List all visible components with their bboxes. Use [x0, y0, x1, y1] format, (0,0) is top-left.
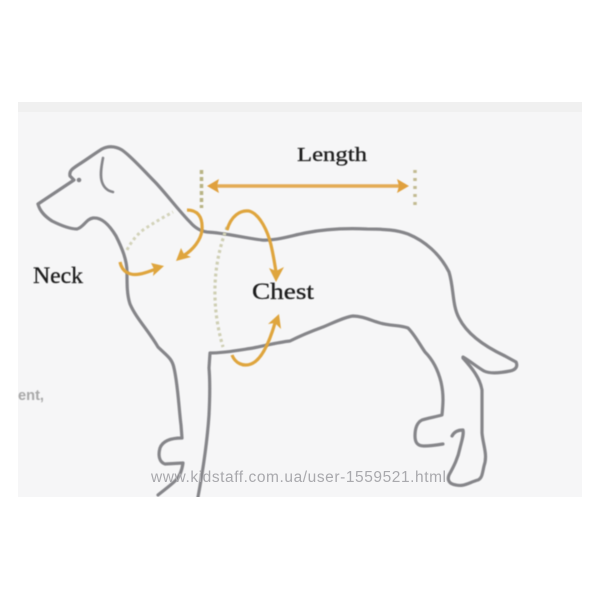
- label: length: Length: [297, 144, 367, 166]
- cropped text fragment: ent,: [18, 387, 44, 404]
- head, back, tail and hind leg: [38, 147, 517, 373]
- length arrow: [207, 179, 409, 193]
- label: chest: Chest: [252, 279, 315, 304]
- dog outline: [38, 147, 517, 497]
- ear: [101, 158, 113, 192]
- eye: [77, 178, 81, 182]
- belly and inner front leg: [198, 316, 443, 497]
- chest arrow: bottom: [232, 314, 281, 365]
- infographic: dog measurement diagram: [18, 102, 582, 497]
- muzzle, throat, chest and front leg: [38, 204, 183, 495]
- label: neck: Neck: [33, 263, 84, 288]
- length left dotted marker: [200, 170, 203, 208]
- panel: image background: [18, 102, 582, 497]
- chest arrow: top: [227, 211, 284, 282]
- watermark: www.kidstaff.com.ua/user-1559521.html: [150, 469, 446, 486]
- hind leg front: [448, 358, 486, 485]
- neck arrow: throat: [120, 262, 164, 276]
- chest dotted guide: [215, 227, 227, 347]
- neck arrow: back of neck: [176, 210, 202, 261]
- neck dotted guide: [127, 212, 173, 250]
- length right dotted marker: [413, 170, 417, 208]
